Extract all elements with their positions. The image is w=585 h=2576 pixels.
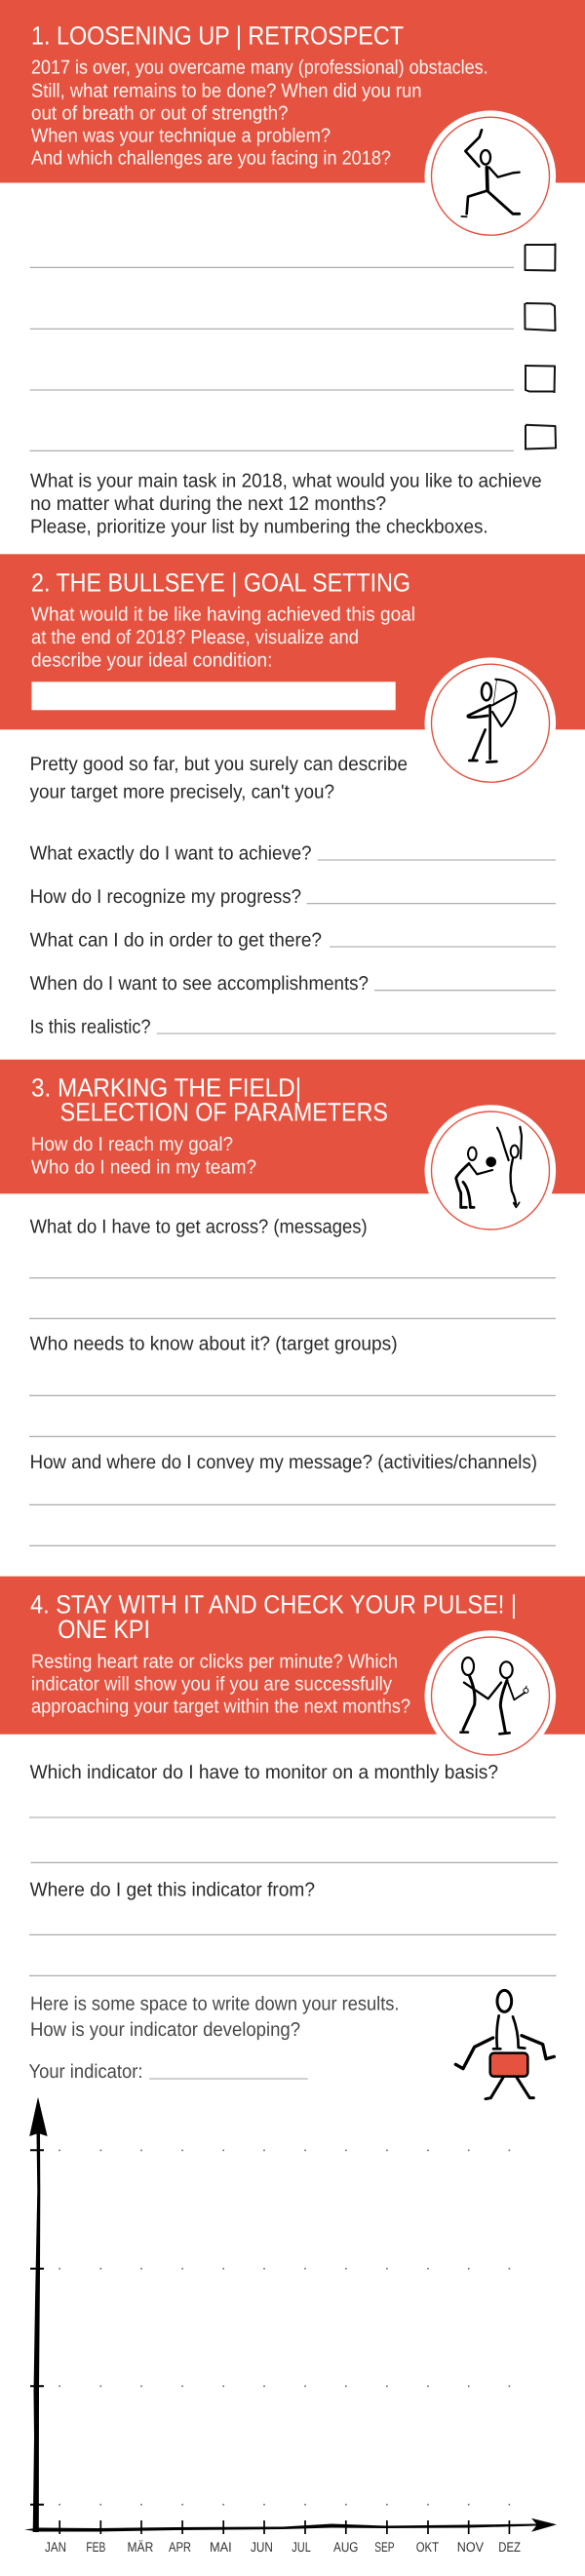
results prompt text: How is your indicator developing? [30, 2019, 300, 2041]
section 4 heading [30, 1589, 517, 1644]
section 1 intro text: 2017 is over, you overcame many (professional) obstacles. [31, 58, 488, 79]
your indicator label with line: Your indicator: [29, 2061, 142, 2083]
month labels: NOV [457, 2539, 485, 2555]
month labels [45, 2539, 521, 2555]
section 1 intro text: When was your technique a problem? [31, 126, 331, 147]
section 3 intro text [31, 1134, 256, 1178]
panel: section 4 stay with it [0, 1577, 585, 2555]
panel: section 3 marking the field [0, 1060, 585, 1545]
panel: section 2 the bullseye [0, 554, 585, 1037]
section 1 prioritise instructions: What is your main task in 2018, what would you like to achieve [30, 470, 542, 491]
question: monthly indicator with answer lines: Which indicator do I have to monitor on a monthly basis? [30, 1762, 498, 1783]
section 2 intro text [31, 605, 415, 671]
results prompt text [30, 1993, 400, 2041]
section 2 header band [0, 554, 585, 729]
section 4 heading: ONE KPI [58, 1615, 150, 1644]
section 3 intro text: Who do I need in my team? [31, 1156, 256, 1178]
section 3 header band [0, 1060, 585, 1193]
section 3 heading [31, 1073, 388, 1126]
section 2 intro text: at the end of 2018? Please, visualize and [31, 627, 359, 648]
section 4 heading: 4. STAY WITH IT AND CHECK YOUR PULSE! | [30, 1589, 517, 1619]
icon: two figures with ball in circle [425, 1105, 556, 1236]
section 1 header band [0, 0, 585, 183]
month labels: MAI [210, 2539, 232, 2555]
section 4 intro text: indicator will show you if you are successfully [31, 1673, 392, 1695]
section 2 intro text: describe your ideal condition: [31, 649, 272, 671]
grid dots [58, 2150, 510, 2506]
section 1 intro text: And which challenges are you facing in 2018? [31, 148, 391, 170]
icon: two figures with stopwatch in circle [425, 1630, 556, 1762]
question: messages with answer lines: What do I have to get across? (messages) [30, 1216, 368, 1237]
section 4 header band [0, 1577, 585, 1735]
section 1 intro text: Still, what remains to be done? When did you run [31, 80, 421, 101]
goal question: what to achieve: What exactly do I want to achieve? [30, 843, 312, 865]
month labels: APR [169, 2539, 191, 2555]
section 2 intro text: What would it be like having achieved this goal [31, 605, 415, 626]
section 1 prioritise instructions: Please, prioritize your list by numbering the checkboxes. [30, 516, 488, 537]
section 3 heading: 3. MARKING THE FIELD| [31, 1073, 301, 1102]
question: indicator source with answer lines: Where do I get this indicator from? [30, 1879, 315, 1900]
goal question: accomplishments: When do I want to see accomplishments? [30, 973, 369, 995]
section 1 intro text [31, 58, 488, 170]
month labels: JAN [45, 2539, 66, 2555]
icon: figure holding red sign [455, 1990, 554, 2099]
section 2 prompt text: your target more precisely, can't you? [30, 781, 334, 802]
icon: archer stick figure in circle [425, 657, 556, 789]
panel: section 1 loosening up [0, 0, 585, 537]
section 2 prompt text [30, 754, 408, 802]
month labels: AUG [333, 2539, 358, 2555]
goal question: progress: How do I recognize my progress? [30, 886, 301, 908]
section 1 intro text: out of breath or out of strength? [31, 103, 289, 125]
month labels: OKT [416, 2539, 439, 2555]
month labels: DEZ [498, 2539, 521, 2555]
x axis arrow [24, 2518, 557, 2534]
section 3 intro text: How do I reach my goal? [31, 1134, 233, 1155]
section 1 prioritise instructions: no matter what during the next 12 months? [30, 493, 386, 515]
line chart grid with axes [24, 2097, 557, 2555]
section 3 heading: SELECTION OF PARAMETERS [60, 1097, 388, 1126]
month labels: JUL [292, 2539, 311, 2555]
section 4 intro text [31, 1651, 410, 1718]
results prompt text: Here is some space to write down your results. [30, 1993, 400, 2014]
goal question: realistic: Is this realistic? [30, 1016, 151, 1037]
section 2 prompt text: Pretty good so far, but you surely can describe [30, 754, 408, 775]
question: activities and channels with answer lines: How and where do I convey my message? (activities/channels) [30, 1452, 537, 1473]
icon: dancing stick figure in circle [425, 110, 556, 242]
section 1 prioritise instructions [30, 470, 542, 537]
goal question: how to get there: What can I do in order to get there? [30, 930, 322, 952]
month labels: JUN [251, 2539, 273, 2555]
section 1 heading: 1. LOOSENING UP | RETROSPECT [31, 21, 404, 51]
white input box [31, 682, 396, 710]
question: target groups with answer lines: Who needs to know about it? (target groups) [30, 1334, 398, 1355]
month labels: MÄR [127, 2539, 153, 2555]
month labels: SEP [374, 2539, 394, 2555]
section 4 intro text: Resting heart rate or clicks per minute? Which [31, 1651, 398, 1672]
section 2 heading: 2. THE BULLSEYE | GOAL SETTING [31, 568, 410, 598]
section 4 intro text: approaching your target within the next months? [31, 1697, 410, 1718]
y axis arrow [29, 2097, 48, 2532]
month labels: FEB [86, 2539, 105, 2555]
answer lines with priority checkboxes [30, 244, 556, 450]
